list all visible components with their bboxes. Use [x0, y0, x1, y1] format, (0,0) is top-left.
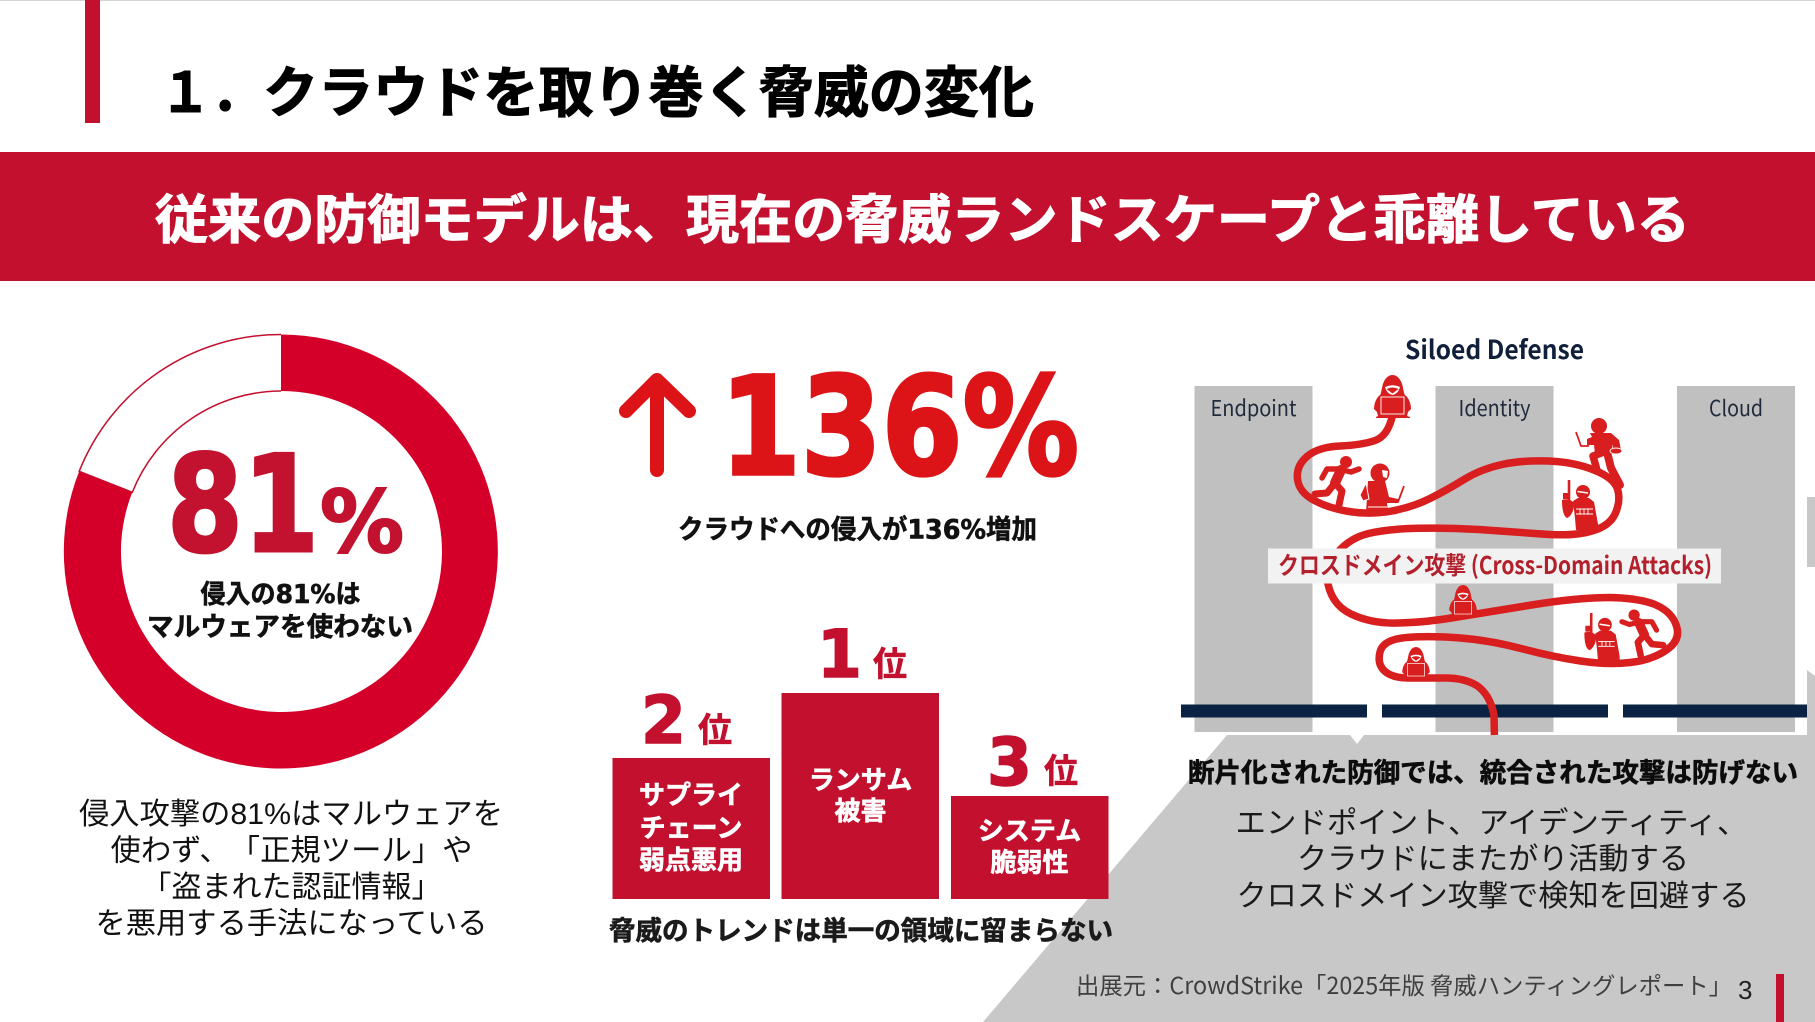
source citation: 出展元：CrowdStrike「2025年版 脅威ハンティングレポート」: [1076, 967, 1732, 1001]
icon: hacker lower: [1402, 647, 1430, 679]
icon: runner lower: [1622, 610, 1663, 655]
donut caption: マルウェアを使わない: [147, 612, 413, 643]
silo: Cloud: [1677, 386, 1795, 732]
icon: hacker at top: [1374, 375, 1411, 418]
silo: Endpoint: Endpoint: [1210, 391, 1296, 423]
panel: 81% donut: [64, 334, 503, 940]
panel: siloed defense diagram: [1181, 330, 1807, 735]
icon: armed soldier lower: [1584, 613, 1620, 662]
podium 2nd place: [612, 682, 770, 899]
caption: クラウドへの侵入が136%増加: [678, 514, 1037, 546]
explanation text: クラウドにまたがり活動する: [1297, 843, 1689, 876]
podium 3rd place: [951, 724, 1108, 899]
podium 1st place: [782, 616, 939, 899]
cross-domain label: クロスドメイン攻撃 (Cross-Domain Attacks): [1278, 547, 1712, 582]
icon: hacker with laptop: [1360, 464, 1404, 513]
podium 3rd place: システム: [978, 816, 1081, 846]
big number 81%: %: [320, 473, 404, 573]
description text: を悪用する手法になっている: [96, 908, 488, 940]
podium 2nd place: 弱点悪用: [639, 845, 743, 875]
silo: Identity: [1436, 386, 1554, 732]
page number: 3: [1738, 975, 1752, 1005]
title accent bar: [85, 0, 100, 123]
footer accent bar: [1776, 974, 1784, 1022]
icon: armed soldier: [1562, 480, 1598, 530]
grey background shape: [983, 497, 1815, 1022]
podium 2nd place: サプライ: [639, 780, 743, 810]
decorative top rule: [0, 0, 1815, 1]
silo: Identity: Identity: [1458, 391, 1531, 423]
podium 1st place: 1: [817, 616, 862, 693]
panel: 136% increase: [626, 349, 1079, 546]
explanation text: エンドポイント、アイデンティティ、: [1236, 807, 1748, 840]
podium 3rd place: 脆弱性: [990, 848, 1069, 878]
big number 81%: 81: [167, 427, 319, 583]
donut caption: [147, 580, 413, 643]
panel: threat ranking podium: [609, 616, 1113, 946]
panel: siloed defense explanation: [1188, 758, 1798, 913]
defense bars: [1181, 704, 1807, 718]
title: １．: [160, 62, 262, 124]
banner: headline: [0, 152, 1815, 281]
podium 1st place: 被害: [834, 796, 887, 826]
explanation text: [1236, 807, 1750, 913]
description text: 使わず、「正規ツール」や: [110, 834, 472, 868]
icon: up arrow: [626, 380, 689, 470]
big number 136%: 136%: [720, 349, 1079, 507]
donut chart: [64, 334, 498, 768]
podium caption: 脅威のトレンドは単一の領域に留まらない: [609, 916, 1113, 946]
description text: 「盗まれた認証情報」: [142, 871, 442, 904]
podium 1st place: ランサム: [809, 765, 912, 795]
icon: climber with laptop: [1576, 418, 1622, 485]
diagram heading: Siloed Defense: [1405, 330, 1584, 367]
description text: 侵入攻撃の81%はマルウェアを: [79, 798, 503, 831]
description text: [79, 798, 503, 940]
donut caption: 侵入の81%は: [200, 580, 360, 610]
silo: Cloud: Cloud: [1709, 391, 1763, 423]
podium 2nd place: チェーン: [640, 813, 742, 843]
podium 2nd place: 位: [698, 712, 732, 750]
bold statement: 断片化された防御では、統合された攻撃は防げない: [1188, 758, 1798, 788]
podium 1st place: 位: [873, 646, 907, 684]
icon: runner: [1315, 456, 1359, 505]
title: クラウドを取り巻く脅威の変化: [263, 62, 1034, 124]
podium 3rd place: 3: [987, 724, 1032, 801]
explanation text: クロスドメイン攻撃で検知を回避する: [1236, 880, 1750, 913]
silo: Endpoint: [1194, 386, 1312, 732]
podium 2nd place: 2: [641, 682, 686, 759]
icon: hacker in identity silo: [1449, 585, 1477, 617]
attack path: [1297, 415, 1678, 735]
banner: headline: 従来の防御モデルは、現在の脅威ランドスケープと乖離している: [155, 191, 1690, 250]
podium 3rd place: 位: [1044, 753, 1078, 791]
